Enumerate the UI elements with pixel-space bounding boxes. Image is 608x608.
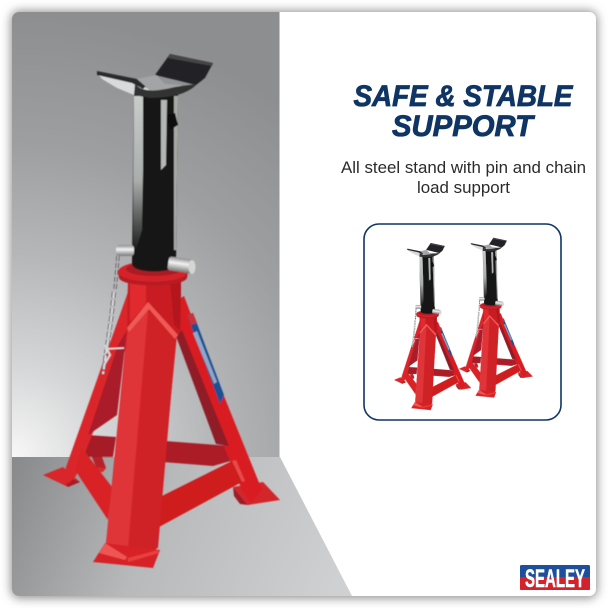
description text: All steel stand with pin and chain [341, 159, 586, 177]
panel: thumbnail frame [364, 224, 561, 420]
title: SUPPORT [392, 110, 536, 143]
locking pin [116, 245, 196, 274]
warning label [187, 313, 224, 404]
safety chain [103, 256, 124, 374]
icon: axle stand photo [43, 54, 280, 568]
front leg [106, 302, 178, 558]
back cross bars [82, 435, 234, 472]
title: SAFE & STABLE [354, 80, 574, 113]
panel: floor [12, 457, 352, 596]
saddle [97, 54, 213, 98]
description text [341, 159, 586, 197]
description text: load support [417, 179, 510, 197]
black tube [132, 94, 178, 272]
right leg [176, 296, 280, 505]
front braces [75, 448, 245, 527]
collar and neck [118, 261, 188, 340]
title [354, 80, 574, 143]
left leg [43, 292, 135, 487]
icon: pair of stands, rear [454, 238, 534, 398]
icon: pair of stands, front [389, 243, 472, 410]
panel: wall backdrop [12, 12, 280, 457]
front foot [93, 543, 160, 568]
